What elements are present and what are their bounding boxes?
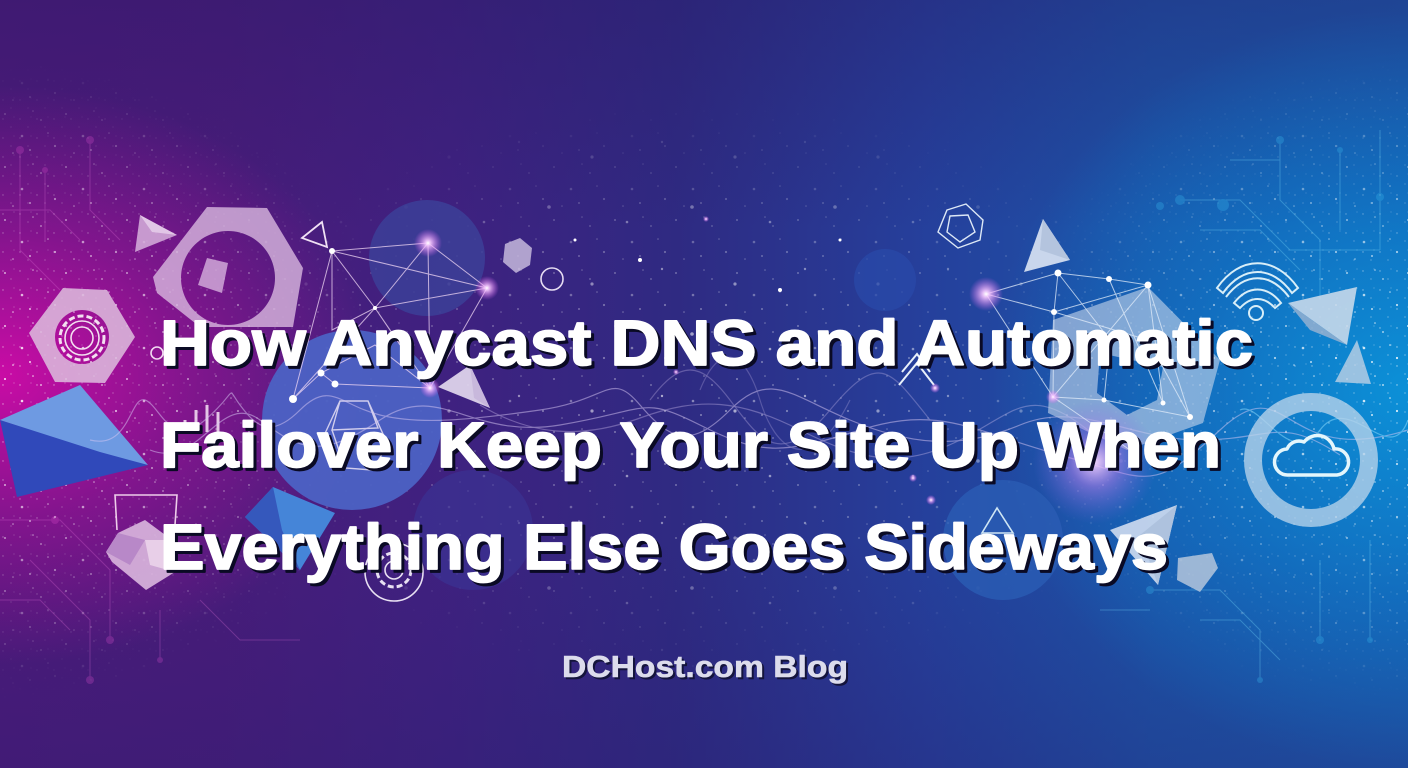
title: How Anycast DNS and Automatic [160, 307, 1253, 379]
outlined triangle [302, 222, 327, 247]
white triangle top right [1024, 219, 1070, 272]
circle: faint blue upper left [369, 200, 485, 316]
network graph left [289, 229, 499, 403]
title: Everything Else Goes Sideways [160, 511, 1168, 583]
circle: dark blue lower center-left [413, 470, 533, 590]
triangle right lower [1335, 340, 1371, 384]
waves [90, 357, 1408, 476]
cloud badge ring [1253, 402, 1369, 518]
small outlined circle [541, 268, 563, 290]
small ring by title [151, 347, 163, 359]
circuit traces: right [1100, 130, 1384, 683]
circle: faint blue upper center [854, 249, 916, 311]
big hexagon ring right [1048, 287, 1220, 450]
title: Failover Keep Your Site Up When [160, 409, 1221, 481]
small triangle upper left [135, 215, 177, 252]
scattered glowing dots [574, 216, 940, 505]
hexagon gear badge left [29, 288, 135, 383]
circle: large blue left [262, 330, 442, 510]
star field: left magenta side [2, 79, 372, 684]
star field: right blue side [1030, 80, 1408, 684]
circle: blue lower center-right [943, 480, 1063, 600]
bar chart icon [185, 405, 218, 432]
network graph right [969, 270, 1193, 450]
chevron icon [899, 354, 934, 385]
subtitle: blog name: DCHost.com Blog [562, 649, 848, 684]
wire hexagon top right [938, 204, 983, 248]
triangle right upper [1288, 287, 1357, 345]
polyhedron lower left [106, 520, 175, 590]
big hexagon ring left [153, 207, 303, 327]
wire polyhedron center-left [322, 401, 388, 470]
triangle lower right [1110, 505, 1177, 585]
small hexagon lower right [1177, 553, 1218, 592]
blue kite shape [0, 385, 148, 497]
white triangle center-left [438, 365, 490, 408]
circuit traces: left [0, 136, 300, 684]
gear icon lower [365, 543, 423, 601]
star field: center [232, 120, 1146, 666]
wifi icon [1217, 263, 1298, 320]
outlined rectangle icon [115, 495, 177, 530]
title [160, 307, 1253, 583]
blue polygon lower left [245, 487, 335, 570]
inner pentagon [198, 258, 228, 293]
large pink glow center right [1033, 400, 1157, 524]
small hexagon top center [503, 238, 532, 273]
outlined triangle lower center [982, 508, 1013, 533]
